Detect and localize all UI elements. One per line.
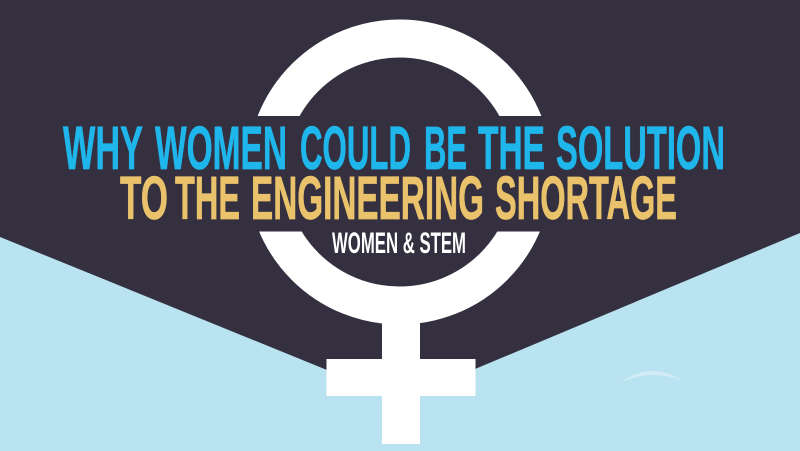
- title band covering symbol: [230, 116, 570, 232]
- title line 2: TO: [120, 164, 168, 232]
- subtitle: WOMEN & STEM: [332, 227, 466, 260]
- title line 1: [63, 114, 725, 182]
- title line 1: THE: [478, 114, 545, 182]
- light blue lower panel: [0, 233, 800, 451]
- faint arc decoration: [620, 371, 683, 383]
- title line 1: WOMEN: [155, 114, 287, 182]
- title line 1: BE: [424, 114, 467, 182]
- title line 1: COULD: [300, 114, 411, 182]
- title line 2: ENGINEERING: [251, 164, 484, 232]
- icon: female symbol: [266, 38, 533, 444]
- title line 1: WHY: [63, 114, 143, 182]
- title line 2: THE: [175, 164, 240, 232]
